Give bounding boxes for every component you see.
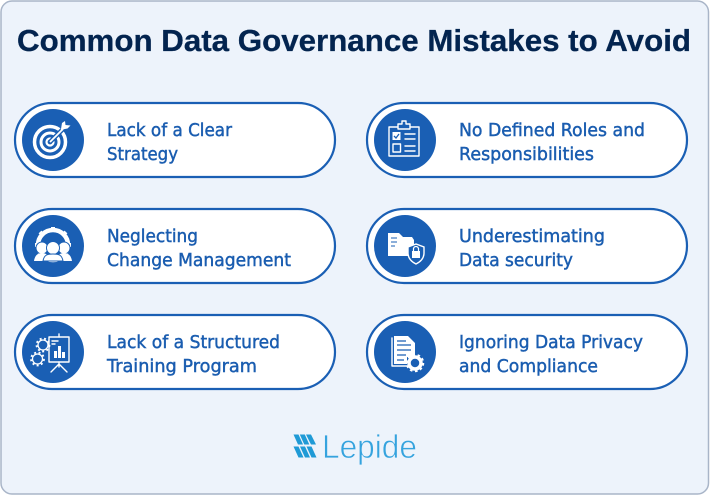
icon: checklist clipboard xyxy=(374,109,436,171)
label: and Compliance xyxy=(459,357,598,377)
icon: document with gear xyxy=(374,321,436,383)
wordmark: Lepide xyxy=(322,428,417,465)
title: Common Data Governance Mistakes to Avoid xyxy=(17,24,691,58)
label: Data security xyxy=(459,251,573,271)
card: Underestimating Data security xyxy=(367,209,687,283)
label: Strategy xyxy=(107,145,178,165)
label: Lack of a Structured xyxy=(107,333,280,353)
icon: gear with people xyxy=(22,215,84,277)
icon: folder with shield lock xyxy=(374,215,436,277)
logo: Lepide xyxy=(294,428,417,465)
card: Ignoring Data Privacy and Compliance xyxy=(367,315,687,389)
label: Training Program xyxy=(106,357,257,377)
label: Ignoring Data Privacy xyxy=(459,333,643,353)
card: Neglecting Change Management xyxy=(15,209,335,283)
label: Change Management xyxy=(107,251,291,271)
label: Lack of a Clear xyxy=(107,121,233,141)
label: Neglecting xyxy=(107,227,198,247)
label: No Defined Roles and xyxy=(459,121,645,141)
card: Lack of a Clear Strategy xyxy=(15,103,335,177)
label: Underestimating xyxy=(459,227,605,247)
icon: target with arrow xyxy=(22,109,84,171)
icon: presentation board with gears xyxy=(22,321,84,383)
icon: striped logo mark xyxy=(294,434,316,458)
card: No Defined Roles and Responsibilities xyxy=(367,103,687,177)
label: Responsibilities xyxy=(459,145,594,165)
card: Lack of a Structured Training Program xyxy=(15,315,335,389)
